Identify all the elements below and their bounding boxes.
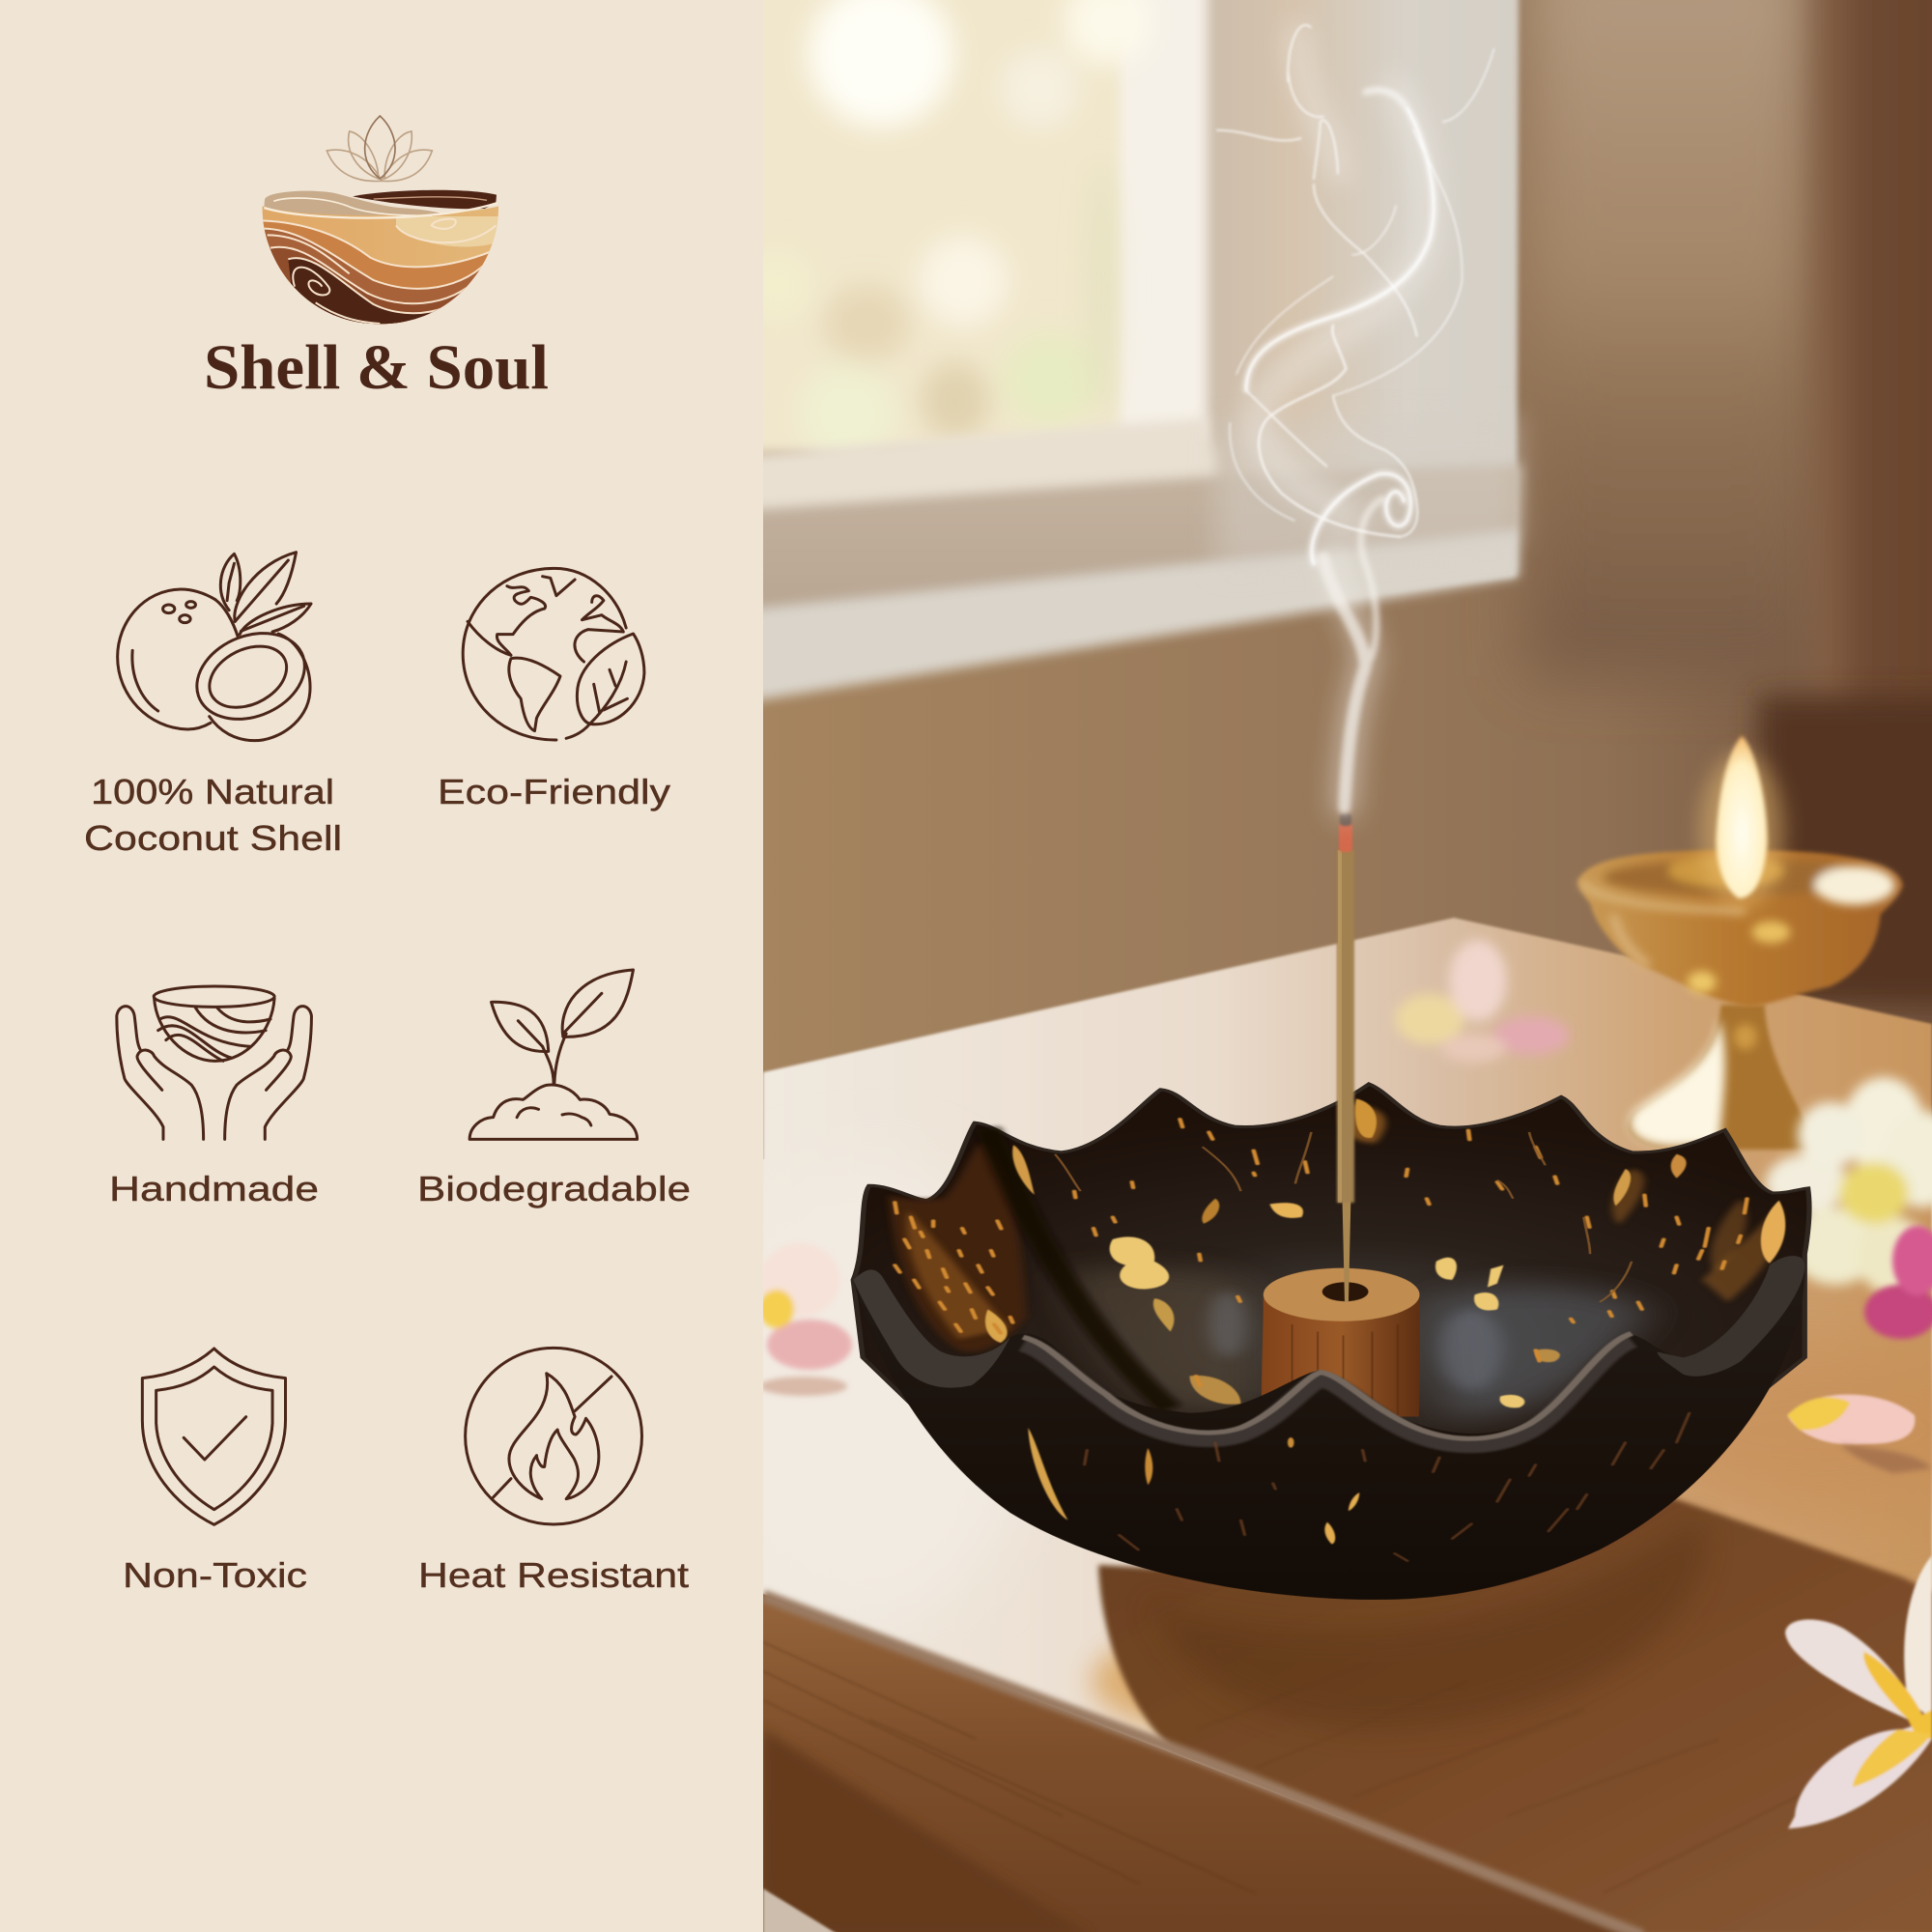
bowl outer body [853, 1256, 1805, 1600]
feature: coconut shell: Coconut Shell [84, 818, 342, 858]
icon: hands holding bowl [117, 986, 311, 1139]
icon: globe with leaf [463, 568, 644, 740]
golden fibre patches [907, 1102, 1780, 1339]
background flowers [759, 940, 1932, 1473]
front lip shading [1023, 1341, 1632, 1446]
left rust fibre panel [889, 1141, 1026, 1351]
table [705, 918, 1932, 1932]
left rim ear [853, 1269, 1010, 1388]
bowl cast shadow [1098, 1495, 1932, 1932]
fibre speckles [895, 1119, 1747, 1385]
feature: heat resistant [418, 1348, 689, 1595]
icon: crossed flame [466, 1348, 641, 1524]
white and pink flowers [1766, 1077, 1932, 1339]
photo: coconut shell incense holder scene [705, 0, 1932, 1932]
feature: handmade [109, 986, 319, 1208]
feature: eco-friendly [438, 568, 670, 811]
label: Handmade [109, 1169, 319, 1208]
right rim ear [1658, 1256, 1805, 1377]
label: 100% Natural [91, 772, 334, 811]
label: Non-Toxic [123, 1555, 307, 1595]
bowl interior [853, 1084, 1809, 1450]
brass lamp with flame [1577, 736, 1903, 1150]
panel: product features [0, 0, 763, 1932]
icon: swirled wooden bowl [258, 190, 502, 328]
coconut shell bowl [853, 1039, 1809, 1600]
frangipani flower [1785, 1555, 1932, 1829]
feature: coconut shell [84, 553, 342, 858]
table front edge [763, 1594, 1642, 1932]
label: Eco-Friendly [438, 772, 670, 811]
incense stick with ember [1337, 813, 1354, 1203]
smoke plume [1217, 25, 1494, 808]
wooden plug ash holder [1262, 1268, 1420, 1417]
grey-brown interior floor [1062, 1268, 1651, 1417]
icon: lotus [327, 116, 432, 182]
label: Biodegradable [417, 1169, 691, 1208]
title: Shell & Soul [204, 332, 549, 403]
icon: coconut [118, 553, 326, 741]
icon: sprout in soil [469, 970, 638, 1139]
feature: biodegradable [417, 970, 691, 1208]
feature: non-toxic [123, 1349, 307, 1595]
icon: shield with check [142, 1349, 286, 1524]
outer shell speckles [1028, 1428, 1359, 1545]
lit scalloped rim [1023, 1333, 1632, 1438]
dark fold in shell [988, 1128, 1171, 1409]
logo: bowl and lotus [258, 116, 502, 328]
incense stick lower section [1343, 1201, 1350, 1302]
label: Heat Resistant [418, 1555, 689, 1595]
window [743, 0, 1522, 703]
